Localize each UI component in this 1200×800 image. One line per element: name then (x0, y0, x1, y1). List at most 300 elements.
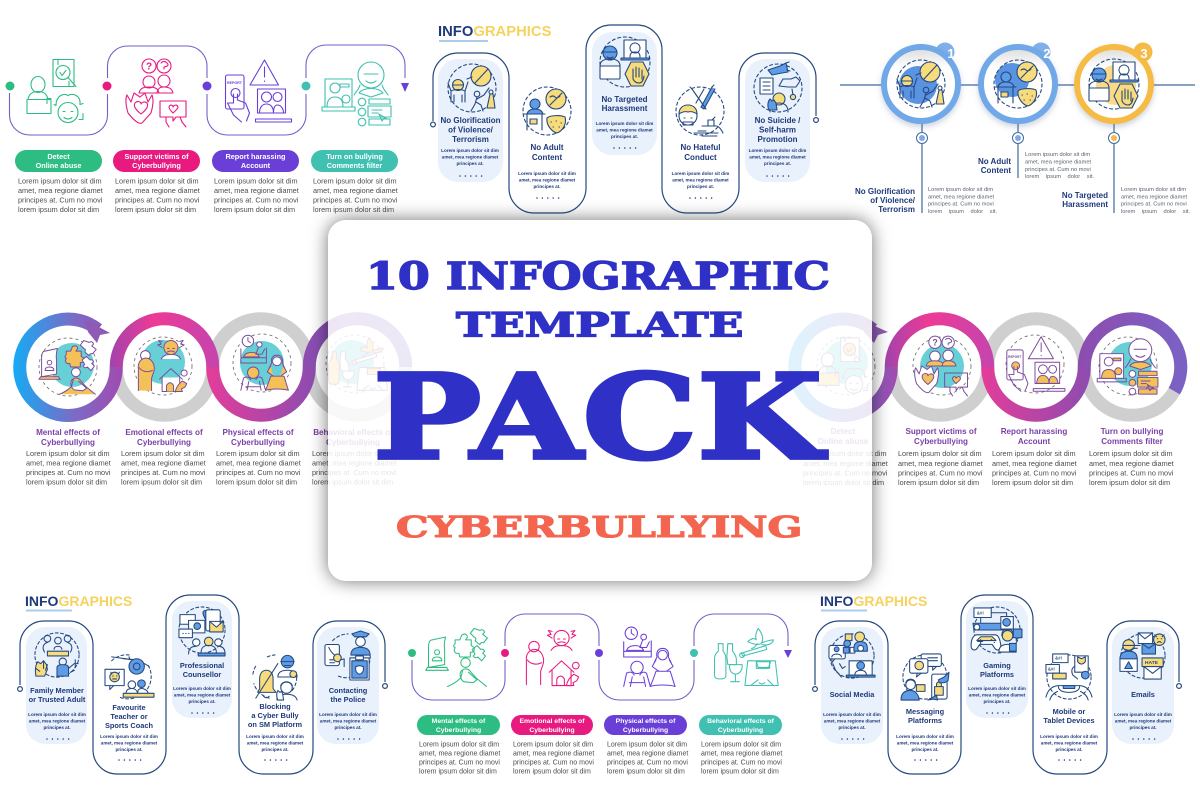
end dots (18, 684, 387, 691)
pill: support (113, 150, 200, 172)
card text: police: principes at. (334, 725, 362, 730)
label 3: No Targeted (1062, 191, 1108, 200)
card text: messaging: Lorem ipsum dolor sit dim (896, 734, 954, 739)
card text: family: or Trusted Adult (29, 695, 86, 704)
connector 2 (1012, 124, 1024, 178)
label: report (1001, 427, 1067, 446)
pill: detect: Online abuse (36, 161, 81, 170)
body text 1: lorem ipsum dolor sit dim (18, 205, 99, 214)
card text: no targeted harassment: Lorem ipsum dolor sit dim (596, 121, 653, 126)
body text mental: lorem ipsum dolor sit dim (26, 478, 107, 486)
icon: messaging (901, 654, 949, 700)
icon: no glorification (448, 64, 496, 112)
pill: emotional: Emotional effects of (520, 718, 585, 725)
label: mental: Cyberbullying (41, 438, 95, 447)
label: mental: Mental effects of (36, 428, 100, 437)
grey rings (891, 319, 1181, 415)
card text: gaming (968, 661, 1026, 713)
card text: teacher: Favourite (112, 703, 146, 712)
body text filter: lorem ipsum dolor sit dim (1089, 478, 1170, 487)
label: support (905, 427, 977, 446)
text 2: lorem ipsum dolor sit. (1025, 174, 1094, 180)
pill: mental: Mental effects of (432, 718, 486, 725)
card text: no targeted harassment: amet, mea regione diamet (596, 128, 653, 132)
body text mental: amet, mea regione diamet (26, 458, 111, 468)
body text mental: Lorem ipsum dolor sit dim (419, 742, 499, 748)
body text behavioral: amet, mea regione diamet (701, 750, 782, 758)
card text: no hateful conduct: principes at. (687, 184, 714, 189)
card text: no adult content: No Adult (530, 143, 564, 152)
label: behavioral (313, 428, 393, 447)
icon: mobile devices (1046, 654, 1092, 700)
body text mental: principes at. Cum no movi (26, 468, 111, 477)
panel: mid-right actions ribbon (795, 319, 1181, 487)
card text: teacher: Lorem ipsum dolor sit dim (100, 734, 158, 739)
card text: no adult content: amet, mea regione diamet (519, 178, 576, 182)
label: detect: Online abuse (818, 437, 869, 446)
card text: emails: principes at. (1129, 725, 1157, 730)
body text behavioral: Lorem ipsum dolor sit dim (312, 449, 396, 458)
body text filter: amet, mea regione diamet (1089, 459, 1174, 468)
icon: no hateful conduct (676, 85, 724, 136)
connector 3 (1108, 124, 1120, 213)
body text physical: amet, mea regione diamet (216, 458, 301, 468)
icon: counsellor (179, 607, 225, 656)
pill: physical: Cyberbullying (623, 727, 668, 734)
pill: mental: Cyberbullying (436, 727, 481, 734)
card text: social media: principes at. (838, 725, 866, 730)
icon: police (325, 631, 370, 680)
card text: no glorification (440, 116, 501, 176)
card text: family: Family Member (30, 686, 84, 695)
pill: filter (311, 150, 398, 172)
card text: family: amet, mea regione diamet (29, 718, 86, 724)
label: mental (36, 428, 100, 447)
badge number 3: 3 (1140, 46, 1148, 61)
label 1 (855, 187, 916, 214)
card text: emails: Emails (1131, 690, 1155, 699)
body text emotional: Lorem ipsum dolor sit dim (513, 742, 593, 748)
body text support: principes at. Cum no movi (898, 468, 983, 478)
icon: physical effects (624, 627, 675, 686)
filled card backgrounds (438, 32, 810, 182)
card text: no glorification: No Glorification (440, 116, 501, 125)
pill: detect: Detect (47, 152, 70, 161)
icon: gaming (971, 607, 1022, 653)
subtitle: CYBERBULLYING (396, 511, 802, 544)
card text: no adult content (518, 143, 576, 198)
body text mental: amet, mea regione diamet (419, 750, 500, 758)
text 3: principes at. Cum no movi (1121, 202, 1187, 208)
icon: comment filter (322, 62, 391, 126)
body text mental: lorem ipsum dolor sit dim (419, 768, 497, 776)
serpentine outline (20, 595, 385, 774)
card text: messaging: Messaging (906, 707, 945, 716)
card text: gaming: principes at. (983, 699, 1011, 704)
body text physical: lorem ipsum dolor sit dim (216, 478, 297, 486)
card text: gaming: Gaming (983, 661, 1011, 670)
icon: mental effects (426, 628, 487, 686)
card text: family: Lorem ipsum dolor sit dim (28, 712, 86, 717)
body text 1: amet, mea regione diamet (18, 186, 103, 195)
card text: messaging (896, 707, 954, 760)
ribbon arrow tip (859, 319, 888, 343)
body text physical: amet, mea regione diamet (607, 750, 688, 758)
icon: detect (818, 338, 867, 393)
serpentine outline (815, 595, 1179, 774)
card text: no adult content: principes at. (533, 184, 561, 189)
card text: no adult content: Lorem ipsum dolor sit dim (518, 171, 576, 176)
circle 1 with icon (884, 47, 958, 121)
card text: mobile (1040, 707, 1098, 760)
serpentine outline (433, 25, 816, 213)
icon: no adult content (523, 87, 571, 135)
body text support: lorem ipsum dolor sit dim (898, 478, 979, 487)
card text: gaming: Lorem ipsum dolor sit dim (968, 686, 1026, 691)
card text: social media: amet, mea regione diamet (824, 718, 881, 724)
body text 3: amet, mea regione diamet (214, 186, 299, 195)
card text: no targeted harassment (596, 95, 653, 148)
body text emotional: principes at. Cum no movi (513, 760, 594, 766)
body text 3: Lorem ipsum dolor sit dim (214, 176, 298, 186)
icon: behavioral effects (714, 628, 778, 686)
label: behavioral: Cyberbullying (326, 438, 380, 447)
icon: filter (1097, 339, 1158, 395)
label 2 (978, 157, 1011, 175)
body text physical: Lorem ipsum dolor sit dim (216, 449, 300, 458)
card text: no hateful conduct: Conduct (684, 153, 717, 162)
panel: bottom-left who to tell cards (18, 593, 387, 774)
card text: police: Contacting (329, 686, 368, 695)
timeline axis (840, 84, 1195, 86)
icon: support victims (126, 59, 186, 127)
connector line (412, 614, 788, 700)
card text: no hateful conduct (672, 143, 729, 198)
icon: teacher (105, 655, 154, 699)
body text emotional: lorem ipsum dolor sit dim (513, 768, 591, 776)
text 1: Lorem ipsum dolor sit dim (928, 187, 993, 193)
step markers (6, 82, 409, 92)
body text 2: Lorem ipsum dolor sit dim (115, 176, 199, 186)
blobs and dashed circles (817, 335, 1157, 395)
logo: infographics: INFOGRAPHICS (820, 593, 927, 609)
body text report: amet, mea regione diamet (992, 459, 1077, 468)
body text 4: lorem ipsum dolor sit dim (313, 205, 394, 214)
card text: teacher: Sports Coach (105, 721, 154, 730)
icon: social media (829, 632, 875, 678)
card text: police: the Police (331, 695, 365, 704)
title card (328, 220, 872, 581)
headline line 2: TEMPLATE (456, 305, 743, 345)
card text: no hateful conduct: Lorem ipsum dolor sit dim (672, 171, 729, 176)
pill: physical: Physical effects of (616, 718, 676, 725)
card text: emails: Lorem ipsum dolor sit dim (1114, 712, 1172, 717)
end dots (431, 118, 818, 127)
label 1: of Violence/ (870, 196, 916, 205)
text 2: principes at. Cum no movi (1025, 167, 1091, 173)
panel: top-left process, detect to filter (6, 45, 409, 214)
label 3: Harassment (1062, 200, 1108, 209)
icon: emotional effects (526, 630, 579, 686)
circle 3 with icon (1077, 47, 1151, 121)
label: detect: Detect (831, 427, 856, 436)
pill: report: Account (241, 161, 271, 170)
card text: messaging: principes at. (911, 747, 939, 752)
body text 2: amet, mea regione diamet (115, 186, 200, 195)
gradient ribbon (795, 319, 1181, 416)
body text emotional: principes at. Cum no movi (121, 468, 206, 477)
label 1: Terrorism (878, 205, 915, 214)
label: report: Report harassing (1001, 427, 1067, 436)
icon: detect online abuse (27, 60, 83, 122)
text 1: lorem ipsum dolor sit. (928, 209, 997, 215)
logo: infographics: INFOGRAPHICS (25, 593, 132, 609)
body text detect: Lorem ipsum dolor sit dim (803, 449, 887, 458)
icon: mental effects (39, 341, 96, 394)
body text support: Lorem ipsum dolor sit dim (898, 449, 982, 458)
body text detect: amet, mea regione diamet (803, 459, 888, 468)
card text: emails (1114, 690, 1172, 739)
pill: support: Support victims of (124, 152, 189, 161)
card text: mobile: principes at. (1055, 747, 1083, 752)
card text: no suicide: amet, mea regione diamet (749, 154, 806, 160)
body text behavioral: principes at. Cum no movi (312, 468, 397, 477)
card text: messaging: amet, mea regione diamet (897, 740, 954, 746)
card text: no adult content: Content (532, 153, 562, 162)
label: support: Cyberbullying (914, 437, 968, 446)
label: filter: Turn on bullying (1101, 427, 1163, 436)
card text: teacher: Teacher or (110, 712, 148, 721)
card text: blocking: a Cyber Bully (251, 711, 299, 720)
label 1: No Glorification (855, 187, 915, 196)
card shadow (328, 220, 872, 581)
label 2: Content (981, 166, 1011, 175)
card text: counsellor: Professional (180, 661, 224, 670)
card text: social media: Social Media (830, 690, 875, 699)
body text emotional: lorem ipsum dolor sit dim (121, 478, 202, 486)
connector 1 (916, 124, 928, 213)
body text 1: principes at. Cum no movi (18, 196, 103, 204)
card text: gaming: Platforms (980, 670, 1014, 679)
pill: support: Cyberbullying (132, 161, 181, 170)
blobs and dashed circles (39, 334, 384, 396)
body text report: lorem ipsum dolor sit dim (992, 478, 1073, 487)
body text 3: principes at. Cum no movi (214, 196, 299, 204)
pill: physical (604, 715, 687, 735)
panel: bottom-middle effects process (408, 614, 792, 776)
label: report: Account (1018, 437, 1050, 446)
card text: no glorification: amet, mea regione diamet (442, 154, 499, 160)
pill: report: Report harassing (225, 152, 286, 161)
card text: blocking: amet, mea regione diamet (247, 740, 304, 746)
card text: blocking: Blocking (259, 702, 291, 711)
card text: no suicide: Lorem ipsum dolor sit dim (749, 148, 806, 153)
body text physical: principes at. Cum no movi (216, 468, 301, 477)
pill: mental (417, 715, 500, 735)
card text: social media: Lorem ipsum dolor sit dim (823, 712, 881, 717)
circle 2 with icon (981, 47, 1055, 121)
card text: counsellor: principes at. (188, 699, 216, 704)
card text: blocking: principes at. (261, 747, 289, 752)
text 1: amet, mea regione diamet (928, 194, 994, 200)
card text: no glorification: Lorem ipsum dolor sit dim (441, 148, 499, 153)
label 2: No Adult (978, 157, 1011, 166)
step markers (408, 649, 792, 658)
body text emotional: amet, mea regione diamet (513, 750, 594, 758)
gradient ribbon (20, 319, 406, 416)
body text behavioral: lorem ipsum dolor sit dim (701, 768, 779, 776)
pill: emotional: Cyberbullying (529, 727, 575, 734)
body text mental: principes at. Cum no movi (419, 760, 500, 766)
label: detect (818, 427, 869, 446)
body text filter: principes at. Cum no movi (1089, 468, 1174, 478)
body text behavioral: lorem ipsum dolor sit dim (312, 478, 393, 486)
card text: gaming: amet, mea regione diamet (969, 692, 1026, 698)
icon: report (1007, 337, 1065, 391)
icon: no suicide promotion (754, 62, 802, 112)
pill: filter: Comments filter (327, 161, 382, 170)
badge disc 3 (1134, 42, 1152, 62)
pill: report (212, 150, 299, 172)
card text: counsellor (173, 661, 231, 713)
badge disc 2 (1032, 42, 1050, 62)
card text: teacher: amet, mea regione diamet (101, 740, 158, 746)
body text report: principes at. Cum no movi (992, 468, 1077, 478)
text 2: Lorem ipsum dolor sit dim (1025, 152, 1090, 158)
text 3: lorem ipsum dolor sit. (1121, 209, 1190, 215)
card text: police (319, 686, 377, 739)
body text detect: principes at. Cum no movi (803, 468, 888, 478)
card text: no suicide: principes at. (764, 161, 791, 166)
card text: family (28, 686, 86, 739)
card text: counsellor: Counsellor (183, 670, 221, 679)
card text: counsellor: Lorem ipsum dolor sit dim (173, 686, 231, 691)
text 3: amet, mea regione diamet (1121, 194, 1187, 200)
label 3 (1062, 191, 1108, 209)
label: physical: Cyberbullying (231, 438, 285, 447)
body text 4: principes at. Cum no movi (313, 196, 398, 204)
icon: blocking (253, 655, 297, 700)
card text: mobile: Tablet Devices (1043, 716, 1095, 725)
panel: mid-left effects ribbon (20, 319, 406, 486)
label: emotional: Emotional effects of (125, 428, 203, 437)
body text emotional: amet, mea regione diamet (121, 458, 206, 468)
body text physical: principes at. Cum no movi (607, 760, 688, 766)
card text: blocking: on SM Platform (248, 720, 303, 729)
label: physical (222, 428, 294, 447)
pill: behavioral: Cyberbullying (718, 727, 763, 734)
card text: social media (823, 690, 881, 739)
pill: behavioral: Behavioral effects of (707, 718, 775, 725)
card text: family: principes at. (43, 725, 71, 730)
body text 1: Lorem ipsum dolor sit dim (18, 176, 102, 186)
body text physical: Lorem ipsum dolor sit dim (607, 742, 687, 748)
filled card backgrounds (26, 601, 379, 744)
card text: mobile: Lorem ipsum dolor sit dim (1040, 734, 1098, 739)
card text: no targeted harassment: Harassment (602, 104, 648, 113)
card text: teacher: principes at. (115, 747, 143, 752)
badge number 2: 2 (1043, 46, 1051, 61)
card text: no suicide: Self-harm (759, 126, 796, 134)
badge disc 1 (936, 42, 954, 62)
card text: no targeted harassment: No Targeted (601, 95, 648, 104)
ribbon arrow tip (84, 319, 110, 343)
card text: counsellor: amet, mea regione diamet (174, 692, 231, 698)
body text behavioral: Lorem ipsum dolor sit dim (701, 742, 781, 748)
body text mental: Lorem ipsum dolor sit dim (26, 449, 110, 458)
icon: report account (226, 60, 292, 122)
label: filter (1101, 427, 1164, 446)
card text: blocking: Lorem ipsum dolor sit dim (246, 734, 304, 739)
card text: no suicide: Promotion (758, 135, 798, 144)
body text behavioral: amet, mea regione diamet (312, 458, 397, 468)
card text: teacher (100, 703, 158, 760)
icon: no targeted harassment (600, 37, 650, 87)
panel: top-right numbered timeline (840, 42, 1195, 215)
card text: no targeted harassment: principes at. (611, 134, 638, 139)
filled card backgrounds (821, 601, 1174, 744)
text 2: amet, mea regione diamet (1025, 160, 1091, 166)
panel: bottom-right platforms cards (813, 593, 1181, 774)
pill: detect (15, 150, 102, 172)
card text: mobile: Mobile or (1053, 707, 1086, 716)
body text 4: Lorem ipsum dolor sit dim (313, 176, 397, 186)
logo: infographics: INFOGRAPHICS (438, 24, 552, 40)
card text: mobile: amet, mea regione diamet (1041, 740, 1098, 746)
label: physical: Physical effects of (222, 428, 294, 437)
body text report: Lorem ipsum dolor sit dim (992, 449, 1076, 458)
label: support: Support victims of (905, 427, 977, 436)
icon: family member (35, 633, 79, 677)
card text: blocking (246, 702, 304, 760)
icon: behavioral effects (329, 338, 388, 390)
icon: support (915, 336, 968, 396)
card text: emails: amet, mea regione diamet (1115, 718, 1172, 724)
body text filter: Lorem ipsum dolor sit dim (1089, 449, 1173, 458)
card text: no hateful conduct: No Hateful (680, 143, 720, 152)
label: emotional: Cyberbullying (137, 438, 191, 447)
body text emotional: Lorem ipsum dolor sit dim (121, 449, 205, 458)
label: emotional (125, 428, 203, 447)
card text: no glorification: principes at. (456, 161, 484, 166)
body text 2: principes at. Cum no movi (115, 196, 200, 204)
card text: no suicide: No Suicide / (755, 116, 801, 125)
end dots (813, 684, 1181, 691)
text 3: Lorem ipsum dolor sit dim (1121, 187, 1186, 193)
icon: emails (1120, 633, 1165, 679)
badge number 1: 1 (947, 46, 955, 61)
body text 3: lorem ipsum dolor sit dim (214, 205, 295, 214)
connector line (10, 45, 405, 135)
body text support: amet, mea regione diamet (898, 459, 983, 468)
panel: top-middle content rules cards (431, 24, 818, 213)
card text: no glorification: of Violence/ (448, 126, 494, 134)
headline line 1: 10 INFOGRAPHIC (366, 254, 830, 298)
pill: behavioral (699, 715, 782, 735)
card text: no glorification: Terrorism (452, 135, 489, 144)
icon: physical effects (241, 335, 288, 390)
body text behavioral: principes at. Cum no movi (701, 760, 782, 766)
label: behavioral: Behavioral effects of (313, 428, 393, 437)
grey rings (116, 319, 406, 415)
headline PACK: PACK (373, 349, 827, 486)
text 1: principes at. Cum no movi (928, 202, 994, 208)
icon: emotional effects (138, 340, 187, 392)
card text: police: Lorem ipsum dolor sit dim (319, 712, 377, 717)
body text 2: lorem ipsum dolor sit dim (115, 205, 196, 214)
body text detect: lorem ipsum dolor sit dim (803, 478, 884, 487)
pill: emotional (511, 715, 593, 735)
